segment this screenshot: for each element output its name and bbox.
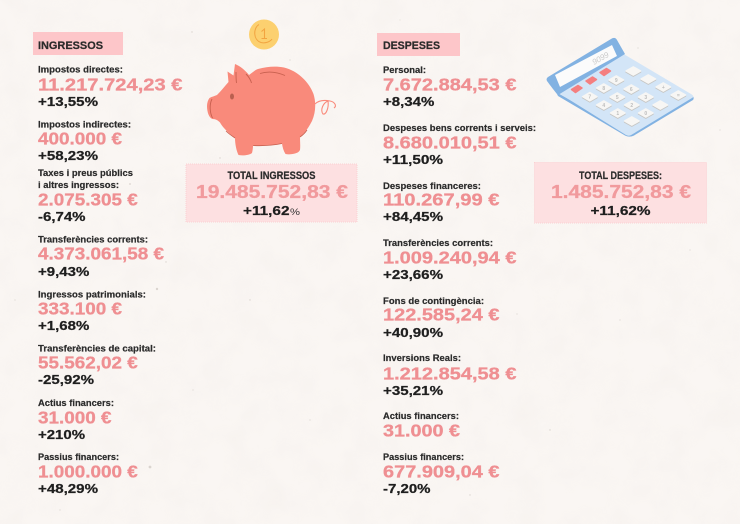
total despeses label: TOTAL DESPESES: [579, 170, 662, 182]
item: despeses financeres [383, 181, 500, 224]
item: transferències corrents: 4.373.061,58 € [38, 244, 164, 264]
item: despeses bens corrents i serveis: Despeses bens corrents i serveis: [383, 123, 536, 133]
item: passius financers [383, 452, 500, 496]
item: transferències corrents [38, 235, 164, 279]
item: taxes i preus públics: Taxes i preus públics [38, 168, 133, 178]
heading: despeses [377, 33, 460, 56]
total despeses change: +11,62% [590, 203, 651, 218]
item: impostos directes: +13,55% [38, 94, 99, 109]
item: passius financers [38, 452, 138, 496]
item: impostos directes: 11.217.724,23 € [38, 75, 183, 95]
item: personal: 7.672.884,53 € [383, 75, 517, 95]
item: passius financers: Passius financers: [38, 452, 119, 462]
icon: calculator [547, 38, 694, 137]
heading: ingressos [33, 32, 123, 55]
item: passius financers: -7,20% [383, 481, 431, 496]
item: actius financers: Actius financers: [38, 398, 114, 408]
item: ingressos patrimonials: 333.100 € [38, 299, 122, 319]
item: transferències corrents: +23,66% [383, 267, 444, 282]
item: actius financers: 31.000 € [383, 421, 460, 441]
item: transferències de capital: Transferències de capital: [38, 344, 156, 354]
item: actius financers [38, 398, 114, 442]
item: inversions reals [383, 353, 517, 398]
calculator key labels: 6 [630, 87, 633, 93]
item: actius financers: 31.000 € [38, 408, 112, 428]
item: transferències de capital: 55.562,02 € [38, 353, 138, 373]
calculator key labels: 1 [616, 111, 619, 117]
calculator keys [582, 67, 686, 125]
item: transferències corrents: Transferències corrents: [383, 238, 493, 248]
item: transferències de capital: -25,92% [38, 372, 95, 387]
calculator key labels: = [677, 93, 680, 99]
panel: ingressos list [33, 32, 183, 496]
calculator key labels [588, 78, 680, 117]
item: inversions reals: 1.212.854,58 € [383, 364, 517, 384]
calculator key labels: 3 [644, 95, 647, 101]
total ingressos label: TOTAL INGRESSOS [228, 170, 316, 182]
item: passius financers: 1.000.000 € [38, 462, 138, 482]
item: ingressos patrimonials: +1,68% [38, 318, 90, 333]
calculator key labels: 8 [602, 86, 605, 92]
calculator key labels: 0 [644, 111, 647, 117]
item: actius financers [383, 411, 460, 441]
item: transferències corrents: +9,43% [38, 264, 90, 279]
panel: total ingressos [186, 164, 357, 222]
item: impostos indirectes [38, 120, 131, 163]
icon: calculator: 9099 [591, 50, 611, 67]
item: personal [383, 65, 517, 109]
total despeses value: 1.485.752,83 € [551, 181, 691, 202]
item: personal: +8,34% [383, 94, 435, 109]
icon: piggy bank [207, 64, 335, 155]
panel: despeses list [377, 33, 536, 496]
item: impostos directes [38, 65, 183, 109]
item: fons de contingència: 122.585,24 € [383, 305, 500, 325]
item: fons de contingència [383, 296, 500, 340]
calculator key labels: 2 [630, 103, 633, 109]
item: inversions reals: +35,21% [383, 383, 444, 398]
calculator key labels: 5 [616, 95, 619, 101]
item: passius financers: 677.909,04 € [383, 462, 500, 482]
item: actius financers: Actius financers: [383, 411, 459, 421]
item: taxes i preus públics: i altres ingressos: [38, 180, 119, 190]
item: actius financers: +210% [38, 427, 86, 442]
item: fons de contingència: Fons de contingència: [383, 296, 484, 306]
item: impostos directes: Impostos directes: [38, 65, 123, 75]
item: impostos indirectes: 400.000 € [38, 129, 122, 149]
calculator key labels: + [662, 85, 665, 91]
calculator key labels: 9 [615, 78, 618, 84]
item: despeses bens corrents i serveis [383, 123, 536, 167]
item: impostos indirectes: Impostos indirectes: [38, 120, 131, 130]
total ingressos change: +11,62 [243, 203, 290, 218]
item: fons de contingència: +40,90% [383, 325, 444, 340]
item: despeses financeres: Despeses financeres: [383, 181, 481, 191]
icon: coin [249, 20, 279, 50]
item: inversions reals: Inversions Reals: [383, 353, 461, 363]
item: transferències corrents: Transferències corrents: [38, 235, 148, 245]
item: impostos indirectes: +58,23% [38, 148, 99, 163]
heading: ingressos: INGRESSOS [38, 40, 103, 52]
total ingressos percent sign: % [290, 207, 300, 217]
item: despeses bens corrents i serveis: +11,50% [383, 152, 444, 167]
item: taxes i preus públics: -6,74% [38, 209, 86, 224]
heading: despeses: DESPESES [383, 40, 440, 52]
item: passius financers: +48,29% [38, 481, 99, 496]
total ingressos value: 19.485.752,83 € [196, 181, 348, 202]
item: taxes i preus públics [38, 168, 138, 224]
item: despeses financeres: 110.267,99 € [383, 190, 500, 210]
item: ingressos patrimonials [38, 290, 146, 333]
item: transferències corrents: 1.009.240,94 € [383, 248, 517, 268]
item: personal: Personal: [383, 65, 426, 75]
item: transferències corrents [383, 238, 517, 282]
item: passius financers: Passius financers: [383, 452, 464, 462]
item: taxes i preus públics: 2.075.305 € [38, 190, 138, 210]
panel: total despeses [534, 162, 706, 223]
calculator key labels: 4 [602, 103, 605, 109]
item: ingressos patrimonials: Ingressos patrimonials: [38, 290, 146, 300]
item: transferències de capital [38, 344, 156, 387]
item: despeses financeres: +84,45% [383, 209, 444, 224]
calculator key labels: 7 [588, 94, 591, 100]
item: despeses bens corrents i serveis: 8.680.010,51 € [383, 133, 517, 153]
